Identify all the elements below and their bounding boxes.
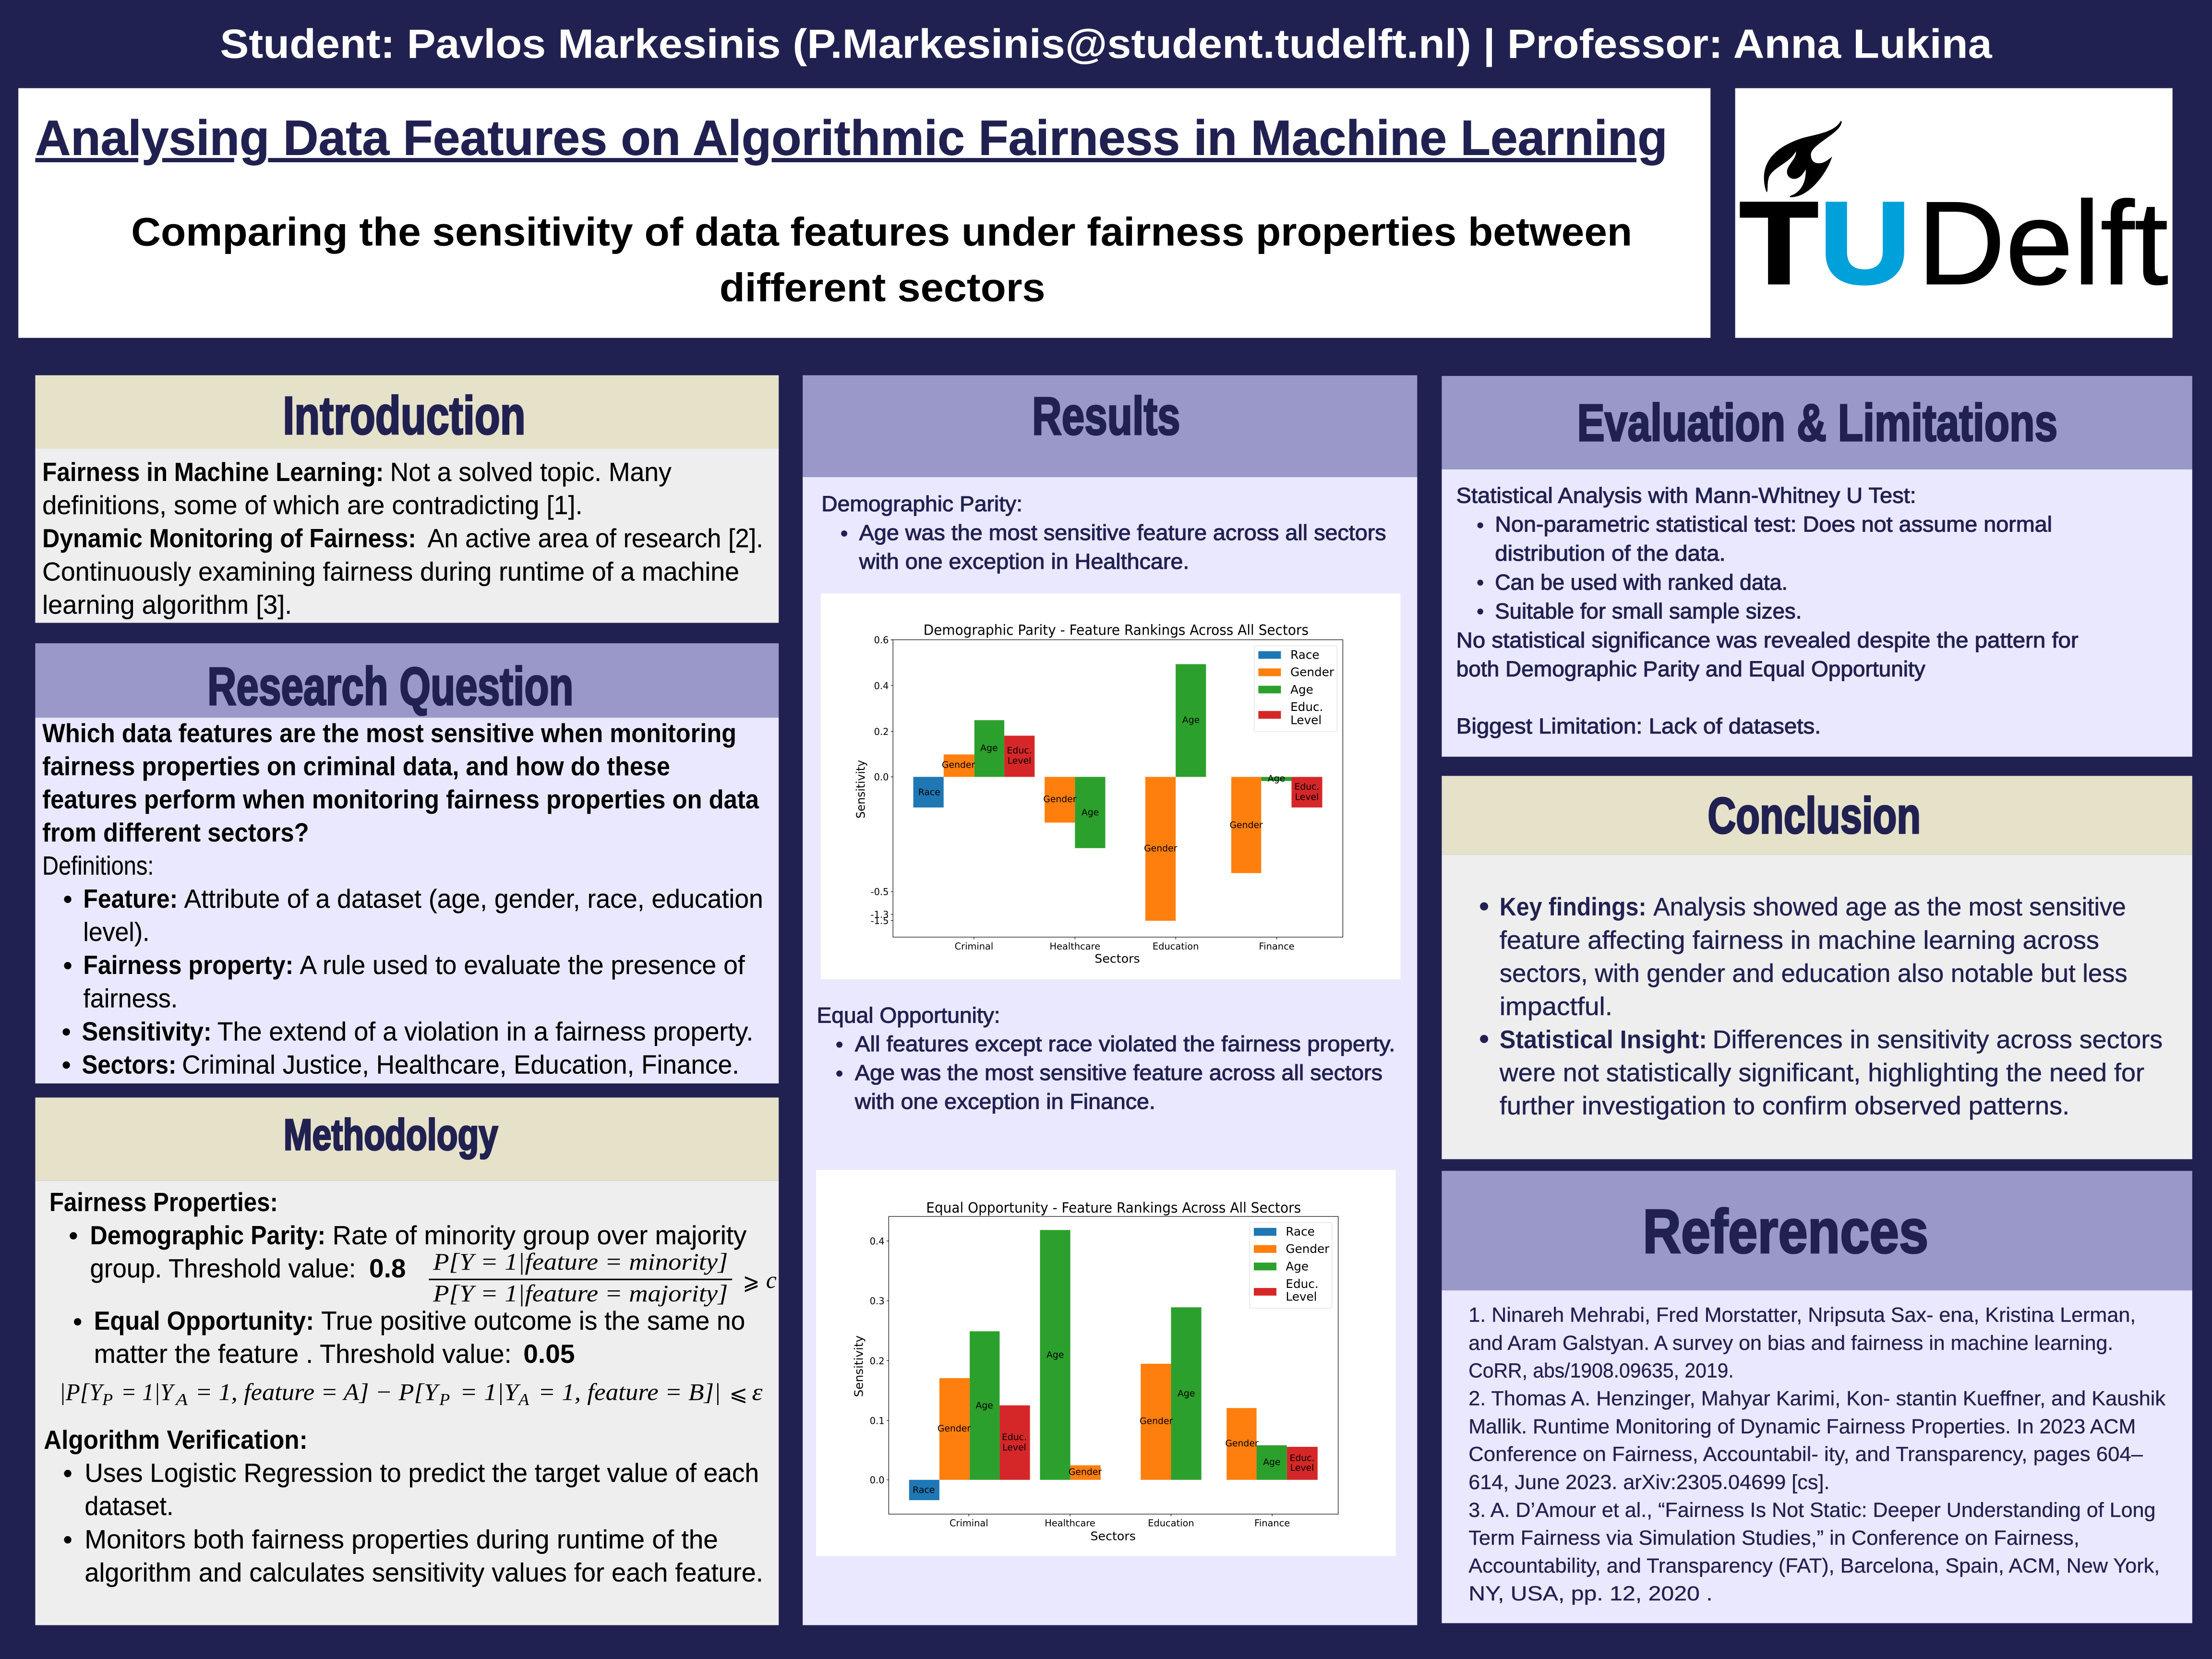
algorithm verification: Monitors both fairness properties during runtime of the: [84, 1525, 718, 1554]
bar labels: [918, 715, 1319, 854]
x axis: Finance: [1254, 1518, 1290, 1529]
y axis: [852, 1236, 889, 1486]
legend: Age: [1290, 683, 1313, 697]
panel: TU Delft logo: [1735, 88, 2173, 338]
x axis: Sectors: [1094, 952, 1140, 966]
intro text: Continuously examining fairness during runtime of a machine: [42, 557, 739, 586]
formula: demographic parity: P[Y = 1|feature = minority]: [433, 1248, 728, 1275]
y axis: 0.4: [874, 680, 889, 691]
demographic parity findings: Demographic Parity:: [821, 492, 1022, 516]
equal opportunity findings: Equal Opportunity:: [817, 1003, 1000, 1028]
y axis: Sensitivity: [852, 1335, 866, 1397]
header: student and professor: Student: Pavlos Markesinis (P.Markesinis@student.tudelft.nl) | Professor: Anna Lukina: [220, 21, 1992, 67]
formula: equal opportunity: ε: [752, 1379, 763, 1406]
y axis: 0.3: [870, 1296, 885, 1307]
reference list: [1468, 1304, 2166, 1605]
bar labels: Gender: [938, 1424, 971, 1434]
formula: equal opportunity: A: [175, 1390, 188, 1409]
algorithm verification: [44, 1425, 763, 1587]
legend: [1254, 646, 1337, 732]
logo wordmark: Delft: [1917, 178, 2168, 310]
formula: equal opportunity: P: [102, 1390, 113, 1409]
fairness properties: 0.05: [523, 1339, 575, 1369]
y axis: 0.1: [870, 1415, 885, 1426]
fairness properties: Rate of minority group over majority: [333, 1221, 747, 1250]
definitions list: level).: [83, 917, 150, 947]
heading: references: References: [1643, 1197, 1928, 1266]
formula: demographic parity: ⩾: [743, 1269, 760, 1295]
panel: conclusion: [1442, 776, 2192, 1159]
heading: introduction: Introduction: [283, 385, 526, 445]
x axis: Education: [1148, 1518, 1194, 1529]
evaluation text: Biggest Limitation: Lack of datasets.: [1456, 714, 1821, 738]
heading: results: Results: [1032, 386, 1180, 446]
research question text: [42, 719, 759, 880]
chart: demographic parity: Demographic Parity - Feature Rankings Across All Sectors: [924, 622, 1309, 638]
panel: references: [1442, 1171, 2192, 1623]
algorithm verification: Algorithm Verification:: [44, 1425, 308, 1455]
formula: demographic parity: [429, 1248, 777, 1307]
reference list: Conference on Fairness, Accountabil- ity, and Transparency, pages 604–: [1468, 1443, 2143, 1466]
evaluation text: distribution of the data.: [1495, 541, 1726, 565]
definitions list: A rule used to evaluate the presence of: [300, 950, 745, 980]
y axis: 0.4: [870, 1236, 885, 1247]
intro text: An active area of research [2].: [427, 524, 763, 553]
y axis: -0.5: [871, 887, 889, 898]
research question text: Which data features are the most sensitive when monitoring: [42, 719, 736, 748]
demographic parity findings: Age was the most sensitive feature across all sectors: [859, 520, 1386, 545]
chart: equal opportunity: Equal Opportunity - Feature Rankings Across All Sectors: [926, 1200, 1301, 1216]
research question text: Definitions:: [42, 851, 154, 880]
logo wordmark: [1740, 178, 2168, 310]
demographic parity findings: with one exception in Healthcare.: [859, 549, 1189, 574]
fairness properties: Equal Opportunity:: [94, 1306, 314, 1335]
intro text: Fairness in Machine Learning:: [42, 457, 384, 487]
bar labels: Level: [1295, 792, 1319, 802]
bar labels: Age: [1178, 1389, 1195, 1399]
evaluation text: Can be used with ranked data.: [1495, 570, 1788, 594]
intro text: learning algorithm [3].: [42, 590, 292, 619]
x axis: [955, 937, 1295, 966]
x axis: Sectors: [1090, 1529, 1136, 1543]
formula: demographic parity: P[Y = 1|feature = majority]: [433, 1280, 728, 1307]
title: Analysing Data Features on Algorithmic Fairness in Machine Learning: [35, 110, 1668, 165]
chart: equal opportunity: [816, 1170, 1396, 1556]
conclusion text: Statistical Insight:: [1500, 1026, 1707, 1054]
formula: equal opportunity: |P[Y: [59, 1379, 105, 1406]
intro text: Not a solved topic. Many: [390, 457, 672, 487]
definitions list: Criminal Justice, Healthcare, Education, Finance.: [182, 1050, 739, 1079]
definitions list: Sectors:: [82, 1050, 176, 1079]
reference list: and Aram Galstyan. A survey on bias and fairness in machine learning.: [1468, 1332, 2113, 1355]
formula: equal opportunity: A: [517, 1390, 529, 1409]
logo wordmark: U: [1820, 179, 1910, 308]
equal opportunity findings: with one exception in Finance.: [854, 1089, 1155, 1114]
reference list: Term Fairness via Simulation Studies,” in Conference on Fairness,: [1468, 1527, 2080, 1550]
evaluation text: both Demographic Parity and Equal Opportunity: [1456, 657, 1925, 681]
logo wordmark: T: [1740, 179, 1818, 308]
legend: Gender: [1290, 665, 1334, 679]
formula: equal opportunity: = 1, feature = A] − P[Y: [195, 1379, 441, 1406]
fairness properties: Fairness Properties:: [49, 1188, 278, 1217]
x axis: Education: [1153, 941, 1199, 952]
formula: demographic parity: c: [766, 1266, 777, 1293]
subtitle: Comparing the sensitivity of data features under fairness properties between: [131, 209, 1632, 254]
x axis: Healthcare: [1050, 941, 1100, 952]
bar labels: Age: [1082, 807, 1099, 817]
legend: Level: [1286, 1290, 1317, 1304]
legend: Gender: [1286, 1242, 1330, 1256]
evaluation text: Non-parametric statistical test: Does not assume normal: [1495, 512, 2052, 536]
heading: methodology: Methodology: [284, 1111, 498, 1159]
bar labels: Age: [1268, 774, 1285, 784]
equal opportunity findings: [817, 1003, 1395, 1114]
bar labels: Age: [1263, 1457, 1280, 1467]
formula: equal opportunity: ⩽: [729, 1382, 748, 1406]
y axis: -1.5: [871, 915, 889, 926]
bar labels: Gender: [1043, 794, 1077, 805]
panel: introduction: [35, 375, 779, 623]
definitions list: Fairness property:: [83, 950, 293, 980]
bar labels: Gender: [1225, 1439, 1259, 1449]
legend: Race: [1290, 648, 1320, 661]
bar labels: Race: [913, 1485, 935, 1495]
reference list: 2. Thomas A. Henzinger, Mahyar Karimi, Kon- stantin Kueffner, and Kaushik: [1468, 1387, 2166, 1410]
panel: research question: [35, 643, 779, 1083]
bar labels: Gender: [1229, 820, 1263, 830]
definitions list: Sensitivity:: [82, 1017, 212, 1046]
algorithm verification: dataset.: [84, 1491, 173, 1521]
legend: [1250, 1223, 1332, 1308]
intro text: definitions, some of which are contradicting [1].: [42, 491, 583, 520]
icon: flame: [1764, 121, 1842, 197]
definitions list: fairness.: [83, 984, 178, 1013]
y axis: 0.6: [874, 635, 889, 646]
reference list: NY, USA, pp. 12, 2020 .: [1468, 1582, 1713, 1605]
y axis: [854, 635, 893, 926]
formula: equal opportunity: = 1|Y: [460, 1379, 521, 1406]
x axis: Criminal: [955, 941, 993, 952]
algorithm verification: Uses Logistic Regression to predict the target value of each: [84, 1458, 759, 1488]
fairness properties: Demographic Parity:: [90, 1221, 325, 1250]
bar labels: Level: [1002, 1443, 1026, 1453]
conclusion text: Key findings:: [1500, 893, 1647, 921]
bar labels: Age: [1182, 715, 1200, 725]
conclusion text: [1480, 893, 2163, 1120]
conclusion text: impactful.: [1500, 992, 1612, 1021]
fairness properties: matter the feature . Threshold value:: [94, 1339, 512, 1369]
y axis: 0.0: [870, 1475, 885, 1486]
evaluation text: Suitable for small sample sizes.: [1495, 599, 1802, 624]
y axis: Sensitivity: [854, 760, 867, 818]
reference list: Accountability, and Transparency (FAT), Barcelona, Spain, ACM, New York,: [1468, 1554, 2160, 1577]
formula: equal opportunity: = 1|Y: [121, 1379, 176, 1406]
heading: research question: Research Question: [207, 656, 574, 716]
conclusion text: further investigation to confirm observed patterns.: [1500, 1092, 2069, 1120]
research question text: features perform when monitoring fairness properties on data: [42, 785, 759, 814]
bar labels: Educ.: [1294, 782, 1319, 792]
fairness properties: [49, 1188, 747, 1369]
legend: Level: [1290, 713, 1322, 727]
definitions list: The extend of a violation in a fairness property.: [217, 1017, 753, 1046]
formula: equal opportunity: P: [439, 1390, 450, 1409]
research question text: from different sectors?: [42, 818, 309, 847]
legend: Age: [1286, 1259, 1309, 1273]
bar labels: Race: [918, 787, 940, 797]
x axis: [950, 1514, 1290, 1543]
definitions list: [62, 884, 763, 1079]
reference list: 614, June 2023. arXiv:2305.04699 [cs].: [1468, 1471, 1830, 1494]
conclusion text: feature affecting fairness in machine learning across: [1500, 926, 2099, 954]
legend: Educ.: [1286, 1277, 1319, 1291]
panel: evaluation and limitations: [1442, 376, 2192, 757]
conclusion text: sectors, with gender and education also notable but less: [1500, 959, 2128, 987]
bar labels: Gender: [942, 760, 975, 770]
bar labels: Gender: [1144, 844, 1178, 854]
heading: evaluation and limitations: Evaluation & Limitations: [1577, 394, 2057, 452]
equal opportunity findings: All features except race violated the fairness property.: [855, 1032, 1395, 1056]
bar labels: Age: [980, 744, 998, 754]
y axis: 0.2: [870, 1356, 885, 1367]
bar labels: Educ.: [1007, 746, 1032, 756]
panel: results: [803, 375, 1417, 1625]
research question text: fairness properties on criminal data, and how do these: [42, 752, 670, 781]
reference list: 3. A. D’Amour et al., “Fairness Is Not Static: Deeper Understanding of Long: [1468, 1499, 2155, 1522]
y axis: 0.0: [874, 772, 889, 783]
panel: methodology: [35, 1097, 779, 1625]
bar labels: Age: [1046, 1350, 1064, 1360]
bar labels: Age: [975, 1401, 993, 1411]
evaluation text: No statistical significance was revealed despite the pattern for: [1456, 628, 2079, 652]
heading: conclusion: Conclusion: [1707, 787, 1921, 844]
bar labels: Gender: [1069, 1467, 1102, 1477]
conclusion text: Analysis showed age as the most sensitive: [1653, 893, 2126, 921]
conclusion text: Differences in sensitivity across sectors: [1713, 1026, 2163, 1054]
bar labels: Level: [1290, 1463, 1314, 1473]
fairness properties: group. Threshold value:: [90, 1254, 356, 1283]
x axis: Finance: [1259, 941, 1295, 952]
conclusion text: were not statistically significant, highlighting the need for: [1499, 1059, 2144, 1087]
legend: Race: [1286, 1225, 1315, 1238]
x axis: Healthcare: [1045, 1518, 1095, 1529]
bar labels: Gender: [1140, 1417, 1173, 1427]
formula: equal opportunity: [59, 1379, 763, 1409]
fairness properties: True positive outcome is the same no: [321, 1306, 745, 1335]
subtitle: [131, 209, 1632, 310]
subtitle: different sectors: [720, 264, 1046, 310]
fairness properties: 0.8: [369, 1254, 406, 1283]
definitions list: Attribute of a dataset (age, gender, race, education: [184, 884, 763, 914]
equal opportunity findings: Age was the most sensitive feature across all sectors: [855, 1060, 1382, 1085]
algorithm verification: algorithm and calculates sensitivity values for each feature.: [84, 1558, 763, 1587]
evaluation text: [1456, 483, 2079, 738]
formula: equal opportunity: = 1, feature = B]|: [538, 1379, 721, 1406]
legend: Educ.: [1290, 700, 1323, 714]
demographic parity findings: [821, 492, 1386, 574]
reference list: Mallik. Runtime Monitoring of Dynamic Fairness Properties. In 2023 ACM: [1468, 1415, 2136, 1438]
bar labels: Educ.: [1289, 1454, 1315, 1464]
y axis: 0.2: [874, 726, 889, 737]
evaluation text: Statistical Analysis with Mann-Whitney U Test:: [1456, 483, 1916, 508]
intro text: [42, 457, 763, 619]
y axis: -1.3: [871, 909, 889, 920]
bar labels: Level: [1008, 756, 1031, 766]
panel: title: [18, 88, 1710, 338]
definitions list: Feature:: [83, 884, 178, 914]
bars: [914, 664, 1322, 921]
reference list: 1. Ninareh Mehrabi, Fred Morstatter, Nripsuta Sax- ena, Kristina Lerman,: [1468, 1304, 2136, 1327]
x axis: Criminal: [950, 1518, 988, 1529]
chart: demographic parity: [821, 593, 1400, 979]
reference list: CoRR, abs/1908.09635, 2019.: [1468, 1359, 1734, 1382]
intro text: Dynamic Monitoring of Fairness:: [42, 524, 416, 553]
bar labels: Educ.: [1002, 1432, 1027, 1443]
bar labels: [913, 1350, 1315, 1495]
bars: [909, 1230, 1318, 1500]
